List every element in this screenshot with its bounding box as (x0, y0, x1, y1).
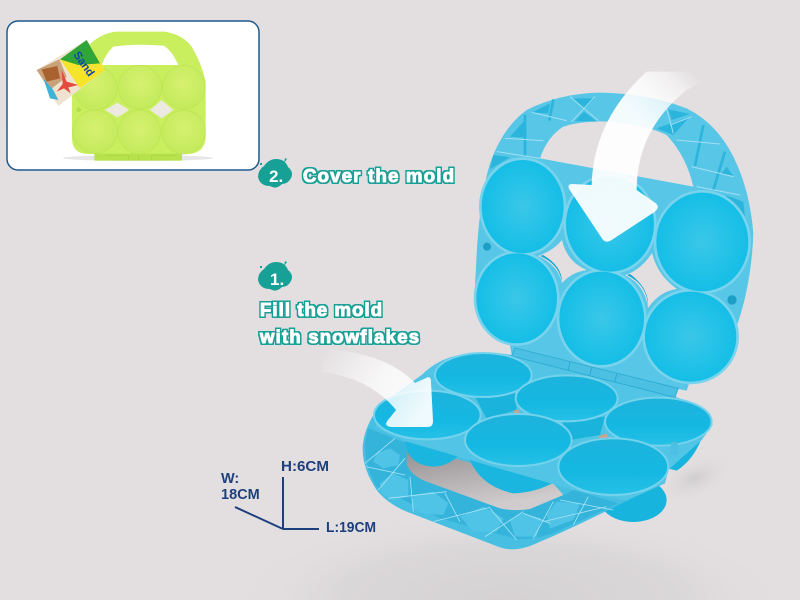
open blue mold (363, 93, 753, 549)
tray cups (374, 353, 712, 495)
icon: step 2 teal splash (258, 158, 292, 188)
tray undersides at the back (600, 438, 702, 522)
dimensions diagram: 18CM (221, 487, 260, 503)
dimensions diagram: H:6CM (281, 459, 329, 475)
handle lattice (490, 98, 745, 217)
step 2 heading (258, 158, 454, 188)
dimensions diagram: W: (221, 471, 239, 487)
lower tray (363, 348, 713, 549)
hinge (512, 348, 678, 397)
green mold body (72, 32, 206, 161)
gaps between lid domes (538, 240, 677, 308)
lid domes (476, 160, 748, 382)
step 1 heading (258, 261, 419, 347)
front dome undersides (405, 440, 555, 493)
panel: closed green mold product photo (7, 21, 259, 170)
product tag (37, 40, 105, 106)
tray peg (671, 442, 678, 455)
upper lid (474, 93, 753, 391)
tray plate (375, 353, 713, 501)
tray rim and base (363, 375, 665, 549)
lid peg holes (483, 243, 491, 251)
rims of lid domes (474, 157, 751, 384)
dimensions diagram: L:19CM (326, 520, 376, 536)
dimensions diagram (221, 459, 376, 536)
icon: step 1 teal splash (258, 261, 292, 291)
gaps in plate (475, 393, 609, 440)
icon: step 2 teal splash: 2. (269, 167, 283, 186)
front lattice (365, 428, 618, 540)
product tag: Sand (71, 50, 96, 79)
step 1 heading: with snowflakes (259, 326, 419, 347)
arrow: into the lid (569, 72, 763, 242)
icon: step 1 teal splash: 1. (270, 270, 284, 289)
arrow: into the tray (322, 349, 433, 427)
step 2 label: Cover the mold (303, 165, 454, 186)
front opening (407, 447, 563, 510)
step 1 label: Fill the mold (260, 299, 382, 320)
floor shadow (230, 420, 790, 600)
